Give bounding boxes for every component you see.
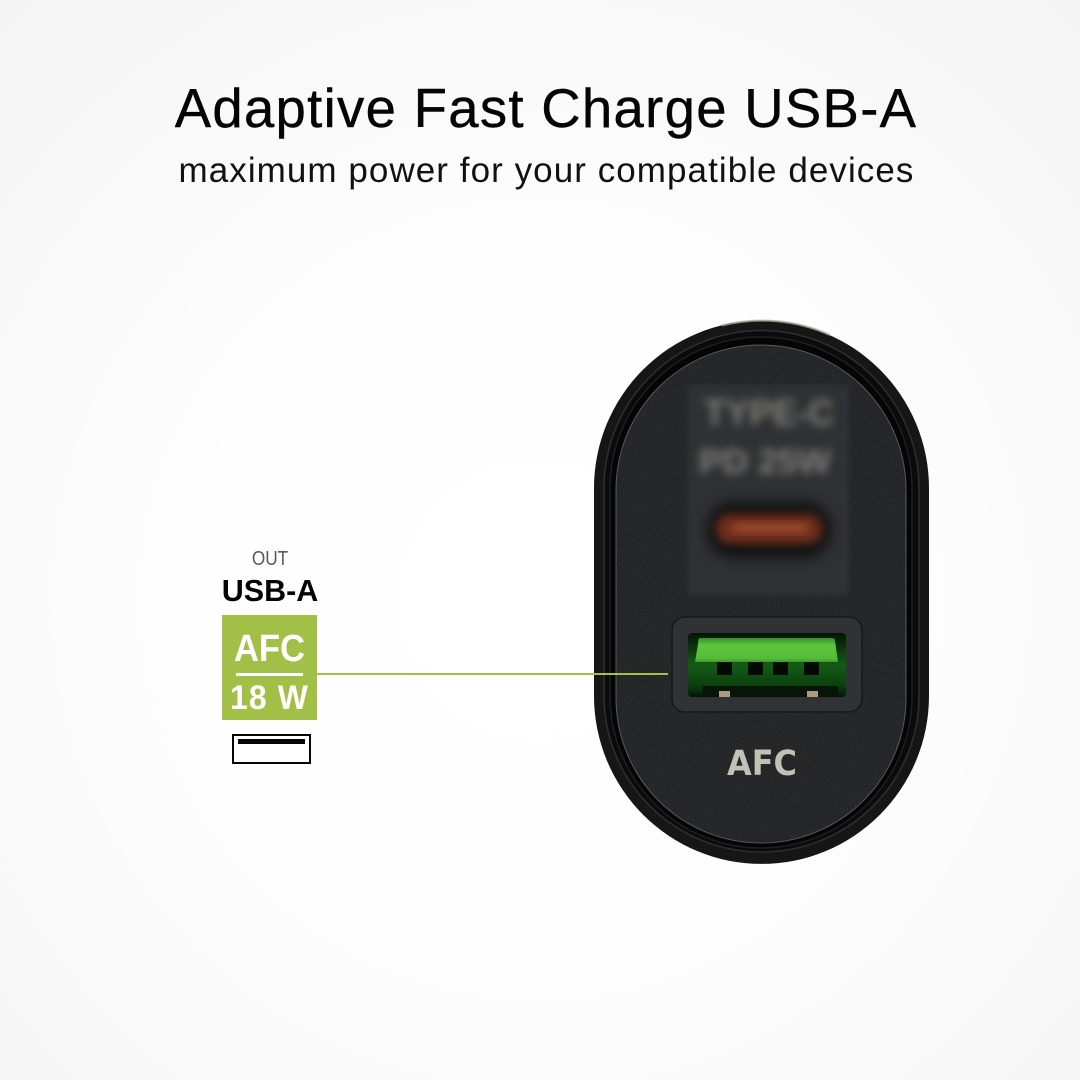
USB-A port — [672, 617, 862, 712]
charger photo illustration — [317, 320, 929, 864]
green badge — [222, 615, 317, 720]
badge text AFC: AFC — [234, 628, 305, 670]
blurred USB-C area: TYPE-C — [704, 392, 834, 433]
title: Adaptive Fast Charge USB-A — [175, 78, 917, 139]
badge text 18 W: 18 W — [230, 679, 309, 717]
OUT label: OUT — [252, 548, 288, 570]
blurred USB-C area: PD 25W — [699, 443, 832, 481]
subtitle: maximum power for your compatible devices — [179, 151, 914, 190]
blurred USB-C area — [688, 385, 849, 595]
charger face — [610, 340, 910, 850]
connector line — [317, 673, 668, 675]
charger body — [594, 321, 929, 864]
icon: USB-A port — [232, 734, 311, 764]
badge divider — [236, 673, 303, 676]
USB-A label: USB-A — [222, 574, 318, 608]
port label group — [222, 548, 318, 764]
AFC label on charger: AFC — [727, 744, 797, 784]
